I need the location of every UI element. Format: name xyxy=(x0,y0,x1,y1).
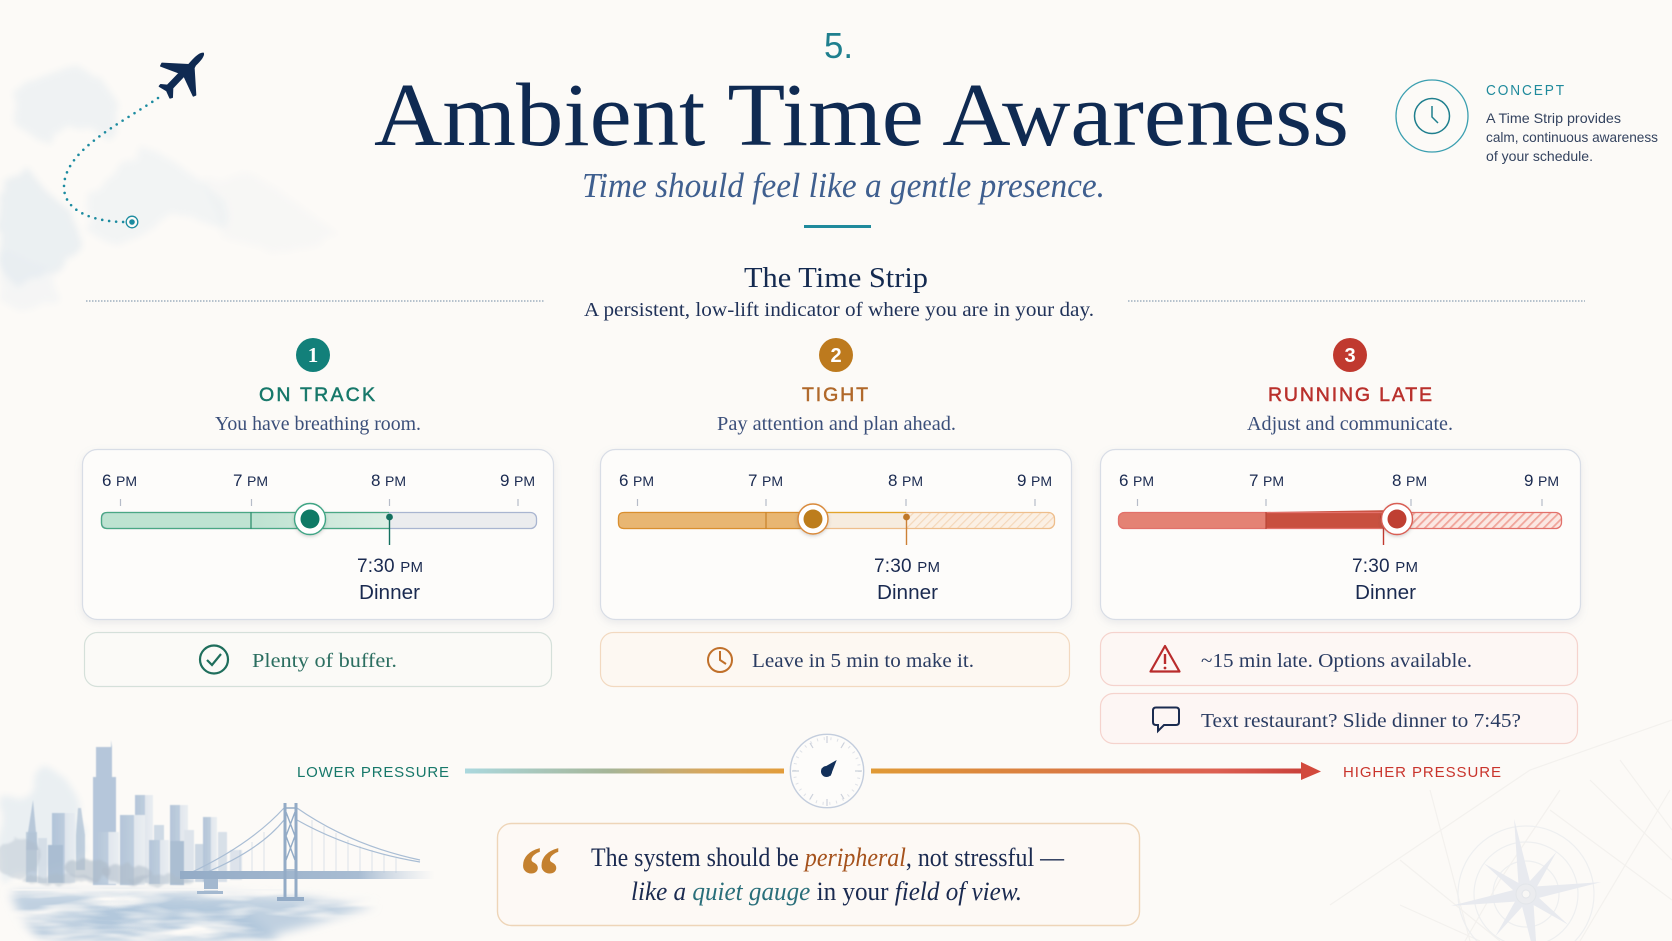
icon: airplane xyxy=(159,53,203,98)
dinner marker xyxy=(903,514,910,545)
quotation mark: “ xyxy=(519,830,561,923)
label: lower pressure: LOWER PRESSURE xyxy=(297,764,449,781)
origin marker xyxy=(126,216,138,228)
dinner label: Dinner xyxy=(877,581,938,604)
hour labels xyxy=(102,471,535,490)
icon: warning xyxy=(1150,646,1180,672)
step badge 1: 1 xyxy=(308,343,318,367)
time strip card xyxy=(600,450,1072,620)
trees and shore xyxy=(0,838,192,885)
compass rose xyxy=(1439,807,1613,941)
pressure scale xyxy=(297,734,1501,808)
hour labels: 8 PM xyxy=(371,471,406,490)
progress bar xyxy=(101,512,537,529)
step badge 3: 3 xyxy=(1344,345,1356,367)
icon: chat bubble xyxy=(1153,708,1179,731)
status: text restaurant: Text restaurant? Slide dinner to 7:45? xyxy=(1201,710,1521,732)
dinner label: 7:30 PM xyxy=(357,556,423,577)
step badge 2 xyxy=(819,338,853,372)
status: plenty of buffer xyxy=(84,632,552,686)
concept text: calm, continuous awareness xyxy=(1486,129,1658,145)
section title: The Time Strip xyxy=(744,262,928,294)
hour labels: 9 PM xyxy=(1524,471,1559,490)
concept heading: CONCEPT xyxy=(1486,83,1566,99)
time strip card xyxy=(1100,450,1580,620)
section description: A persistent, low-lift indicator of where you are in your day. xyxy=(584,299,1094,321)
icon: clock xyxy=(708,648,732,672)
status: late: ~15 min late. Options available. xyxy=(1201,650,1472,672)
subtitle: Time should feel like a gentle presence. xyxy=(582,167,1105,205)
description: Adjust and communicate. xyxy=(1247,413,1453,435)
concept text xyxy=(1486,110,1658,164)
quote panel xyxy=(498,824,1140,926)
concept text: of your schedule. xyxy=(1486,148,1593,164)
gradient bar left xyxy=(465,768,784,774)
icon: clock xyxy=(1396,80,1468,152)
concept callout xyxy=(1396,80,1658,164)
hour labels: 7 PM xyxy=(1249,471,1284,490)
dotted divider left xyxy=(86,300,544,302)
panel: tight xyxy=(600,338,1072,686)
heading: tight: TIGHT xyxy=(802,384,868,406)
title rule xyxy=(804,225,871,228)
dinner label xyxy=(357,556,423,604)
section heading: the time strip xyxy=(86,262,1585,321)
dotted flight path xyxy=(64,98,158,222)
gradient bar right xyxy=(871,768,1302,774)
hour labels: 6 PM xyxy=(102,471,137,490)
icon: gauge xyxy=(790,734,864,808)
dinner label xyxy=(1352,556,1418,604)
icon: check xyxy=(200,646,228,674)
current time knob xyxy=(294,504,326,534)
status: text restaurant xyxy=(1100,694,1578,744)
map lines and compass watermark xyxy=(1330,720,1672,941)
hour labels: 9 PM xyxy=(500,471,535,490)
watercolor clouds xyxy=(0,65,340,310)
header xyxy=(374,25,1349,228)
hour labels: 8 PM xyxy=(1392,471,1427,490)
dinner marker xyxy=(1380,514,1387,545)
status: plenty of buffer: Plenty of buffer. xyxy=(252,650,397,672)
dinner label: 7:30 PM xyxy=(1352,556,1418,577)
title: Ambient Time Awareness xyxy=(374,66,1349,165)
status: leave in 5 min: Leave in 5 min to make it. xyxy=(752,650,974,672)
bridge xyxy=(180,803,438,901)
progress bar xyxy=(618,512,1055,529)
dinner label xyxy=(874,556,940,604)
city skyline and bridge illustration xyxy=(0,740,438,941)
heading: running late: RUNNING LATE xyxy=(1268,384,1432,406)
hour labels: 6 PM xyxy=(1119,471,1154,490)
step badge 1 xyxy=(296,338,330,372)
dinner marker xyxy=(386,514,393,545)
hour labels: 7 PM xyxy=(748,471,783,490)
dinner label: 7:30 PM xyxy=(874,556,940,577)
status: leave in 5 min xyxy=(600,632,1070,686)
dinner label: Dinner xyxy=(359,581,420,604)
panel: running late xyxy=(1100,338,1580,744)
time strip card xyxy=(82,450,554,620)
label: higher pressure: HIGHER PRESSURE xyxy=(1343,764,1501,781)
arrow head xyxy=(1301,762,1321,780)
description: You have breathing room. xyxy=(215,413,421,435)
dotted divider right xyxy=(1128,300,1585,302)
distant clouds behind skyline xyxy=(0,768,85,880)
hour labels: 7 PM xyxy=(233,471,268,490)
step badge 3 xyxy=(1333,338,1367,372)
status: late xyxy=(1100,632,1578,686)
hour labels: 6 PM xyxy=(619,471,654,490)
quote line 1: The system should be peripheral, not stressful — xyxy=(591,842,1064,872)
hour labels: 9 PM xyxy=(1017,471,1052,490)
step badge 2: 2 xyxy=(830,345,842,367)
current time knob xyxy=(798,504,828,534)
current time knob xyxy=(1382,504,1412,534)
hour labels xyxy=(619,471,1052,490)
concept text: A Time Strip provides xyxy=(1486,110,1621,126)
section number: 5. xyxy=(824,25,853,66)
panel: on track xyxy=(82,338,554,686)
water xyxy=(10,892,375,941)
dinner label: Dinner xyxy=(1355,581,1416,604)
flight path illustration xyxy=(64,53,203,228)
hour labels: 8 PM xyxy=(888,471,923,490)
description: Pay attention and plan ahead. xyxy=(717,413,956,435)
progress bar xyxy=(1118,510,1562,529)
heading: on track: ON TRACK xyxy=(259,384,375,406)
quote line 2: like a quiet gauge in your field of view. xyxy=(631,876,1022,906)
hour labels xyxy=(1119,471,1559,490)
buildings xyxy=(26,740,242,885)
